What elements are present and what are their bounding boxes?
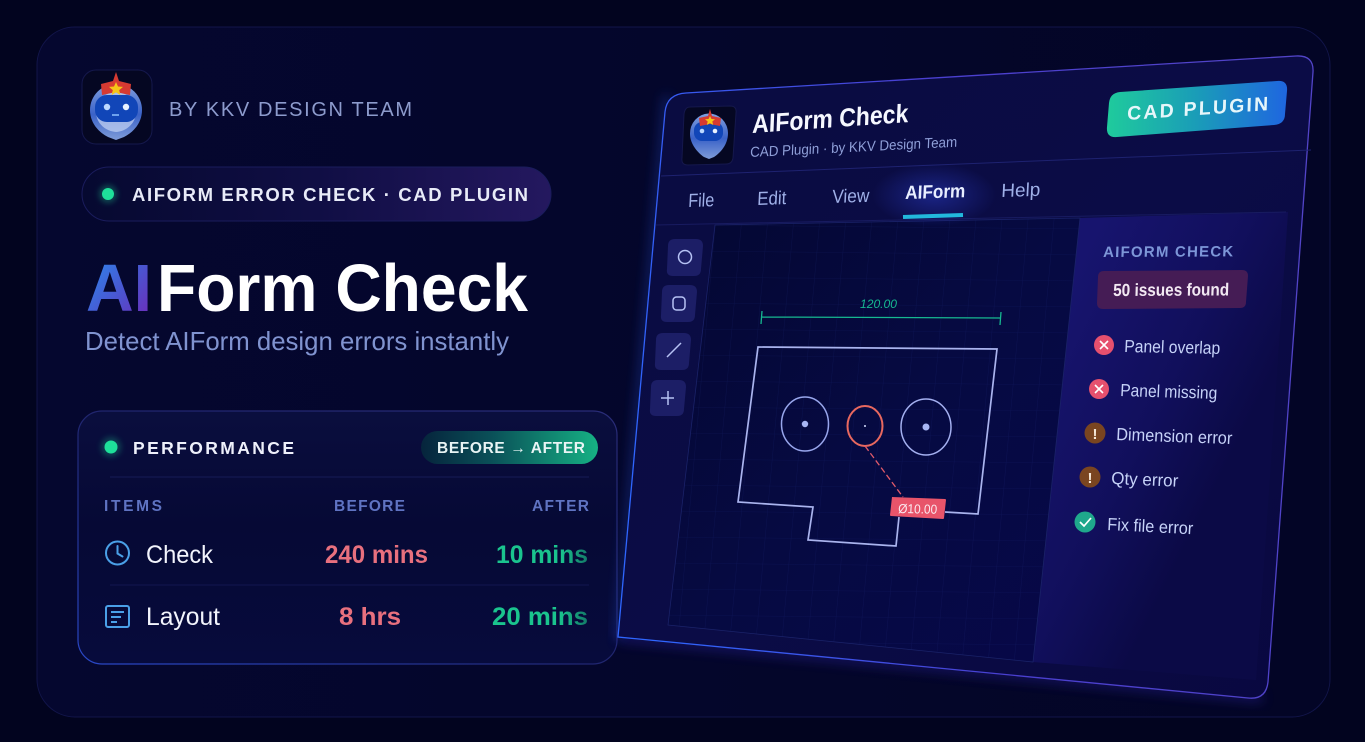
row: check xyxy=(106,541,588,569)
icon: clock xyxy=(106,542,129,564)
issues badge xyxy=(1097,270,1248,309)
column headers xyxy=(104,498,589,515)
item: qty error: Qty error xyxy=(1111,468,1179,491)
window subtitle: CAD Plugin · by KKV Design Team xyxy=(750,135,957,161)
item: panel missing: Panel missing xyxy=(1120,380,1218,403)
row: check: Check xyxy=(146,541,213,569)
error tag: Ø10.00 xyxy=(898,501,938,517)
tool: plus xyxy=(650,380,686,416)
window title: AIForm Check xyxy=(752,98,909,139)
panel: CAD plugin window xyxy=(618,56,1313,698)
item: fix file error xyxy=(1074,512,1194,538)
row: check: 10 mins xyxy=(496,541,588,569)
title: AI xyxy=(86,251,152,326)
item: qty error xyxy=(1080,466,1179,491)
hole right xyxy=(901,399,951,455)
icon: robot logo xyxy=(82,70,152,144)
menu bar: Edit xyxy=(757,188,787,210)
icon: document xyxy=(106,606,129,627)
subtitle: Detect AIForm design errors instantly xyxy=(85,326,509,356)
item: panel overlap: Panel overlap xyxy=(1124,336,1221,358)
dimension line: 120.00 xyxy=(860,297,897,311)
panel: performance xyxy=(78,411,617,664)
row: layout xyxy=(106,603,588,631)
item: panel overlap xyxy=(1094,335,1221,358)
sidebar heading: AIFORM CHECK xyxy=(1103,243,1234,261)
hole error highlighted xyxy=(848,406,882,446)
tool: circle xyxy=(667,239,703,276)
tag pill xyxy=(82,167,551,221)
badge: before to after: BEFORE → AFTER xyxy=(437,440,585,457)
hole left xyxy=(782,397,828,451)
item: qty error: ! xyxy=(1088,470,1092,487)
dashed leader xyxy=(865,446,903,497)
row: layout: 8 hrs xyxy=(339,603,401,631)
icon: window logo xyxy=(682,106,736,165)
header: logo and team name xyxy=(82,70,412,144)
item: dimension error: Dimension error xyxy=(1116,424,1233,448)
button: CAD plugin: CAD PLUGIN xyxy=(1127,93,1269,125)
byline: BY KKV DESIGN TEAM xyxy=(169,99,412,121)
error tag xyxy=(890,497,946,519)
active tab underline xyxy=(903,215,963,217)
title: Form Check xyxy=(157,251,529,326)
tool: rounded square xyxy=(661,285,697,322)
results sidebar xyxy=(1074,243,1248,538)
row: check: 240 mins xyxy=(325,541,428,569)
CAD drawing xyxy=(738,297,1001,546)
item: dimension error xyxy=(1084,422,1233,448)
tool buttons xyxy=(650,239,703,416)
window header xyxy=(682,81,1287,165)
tool: line xyxy=(655,333,691,370)
button: CAD plugin xyxy=(1107,81,1287,137)
row: layout: Layout xyxy=(146,603,220,631)
item: fix file error: Fix file error xyxy=(1107,514,1194,538)
column headers: AFTER xyxy=(532,498,589,515)
menu bar: Help xyxy=(1001,180,1041,202)
menu bar xyxy=(688,163,1041,227)
issues badge: 50 issues found xyxy=(1113,279,1229,300)
canvas xyxy=(668,218,1080,662)
part outline xyxy=(738,347,997,546)
column headers: ITEMS xyxy=(104,498,162,515)
menu bar: File xyxy=(688,190,715,212)
tag pill: AIFORM ERROR CHECK · CAD PLUGIN xyxy=(132,184,528,205)
menu bar: AIForm xyxy=(905,181,966,204)
dimension line xyxy=(761,297,1001,325)
item: dimension error: ! xyxy=(1092,426,1098,443)
badge: before to after xyxy=(421,431,598,464)
performance heading: PERFORMANCE xyxy=(133,438,294,458)
row: layout: 20 mins xyxy=(492,603,588,631)
column headers: BEFORE xyxy=(334,498,405,515)
menu bar: View xyxy=(832,186,870,208)
sidebar: check results background xyxy=(1033,212,1288,680)
item: panel missing xyxy=(1089,379,1218,403)
